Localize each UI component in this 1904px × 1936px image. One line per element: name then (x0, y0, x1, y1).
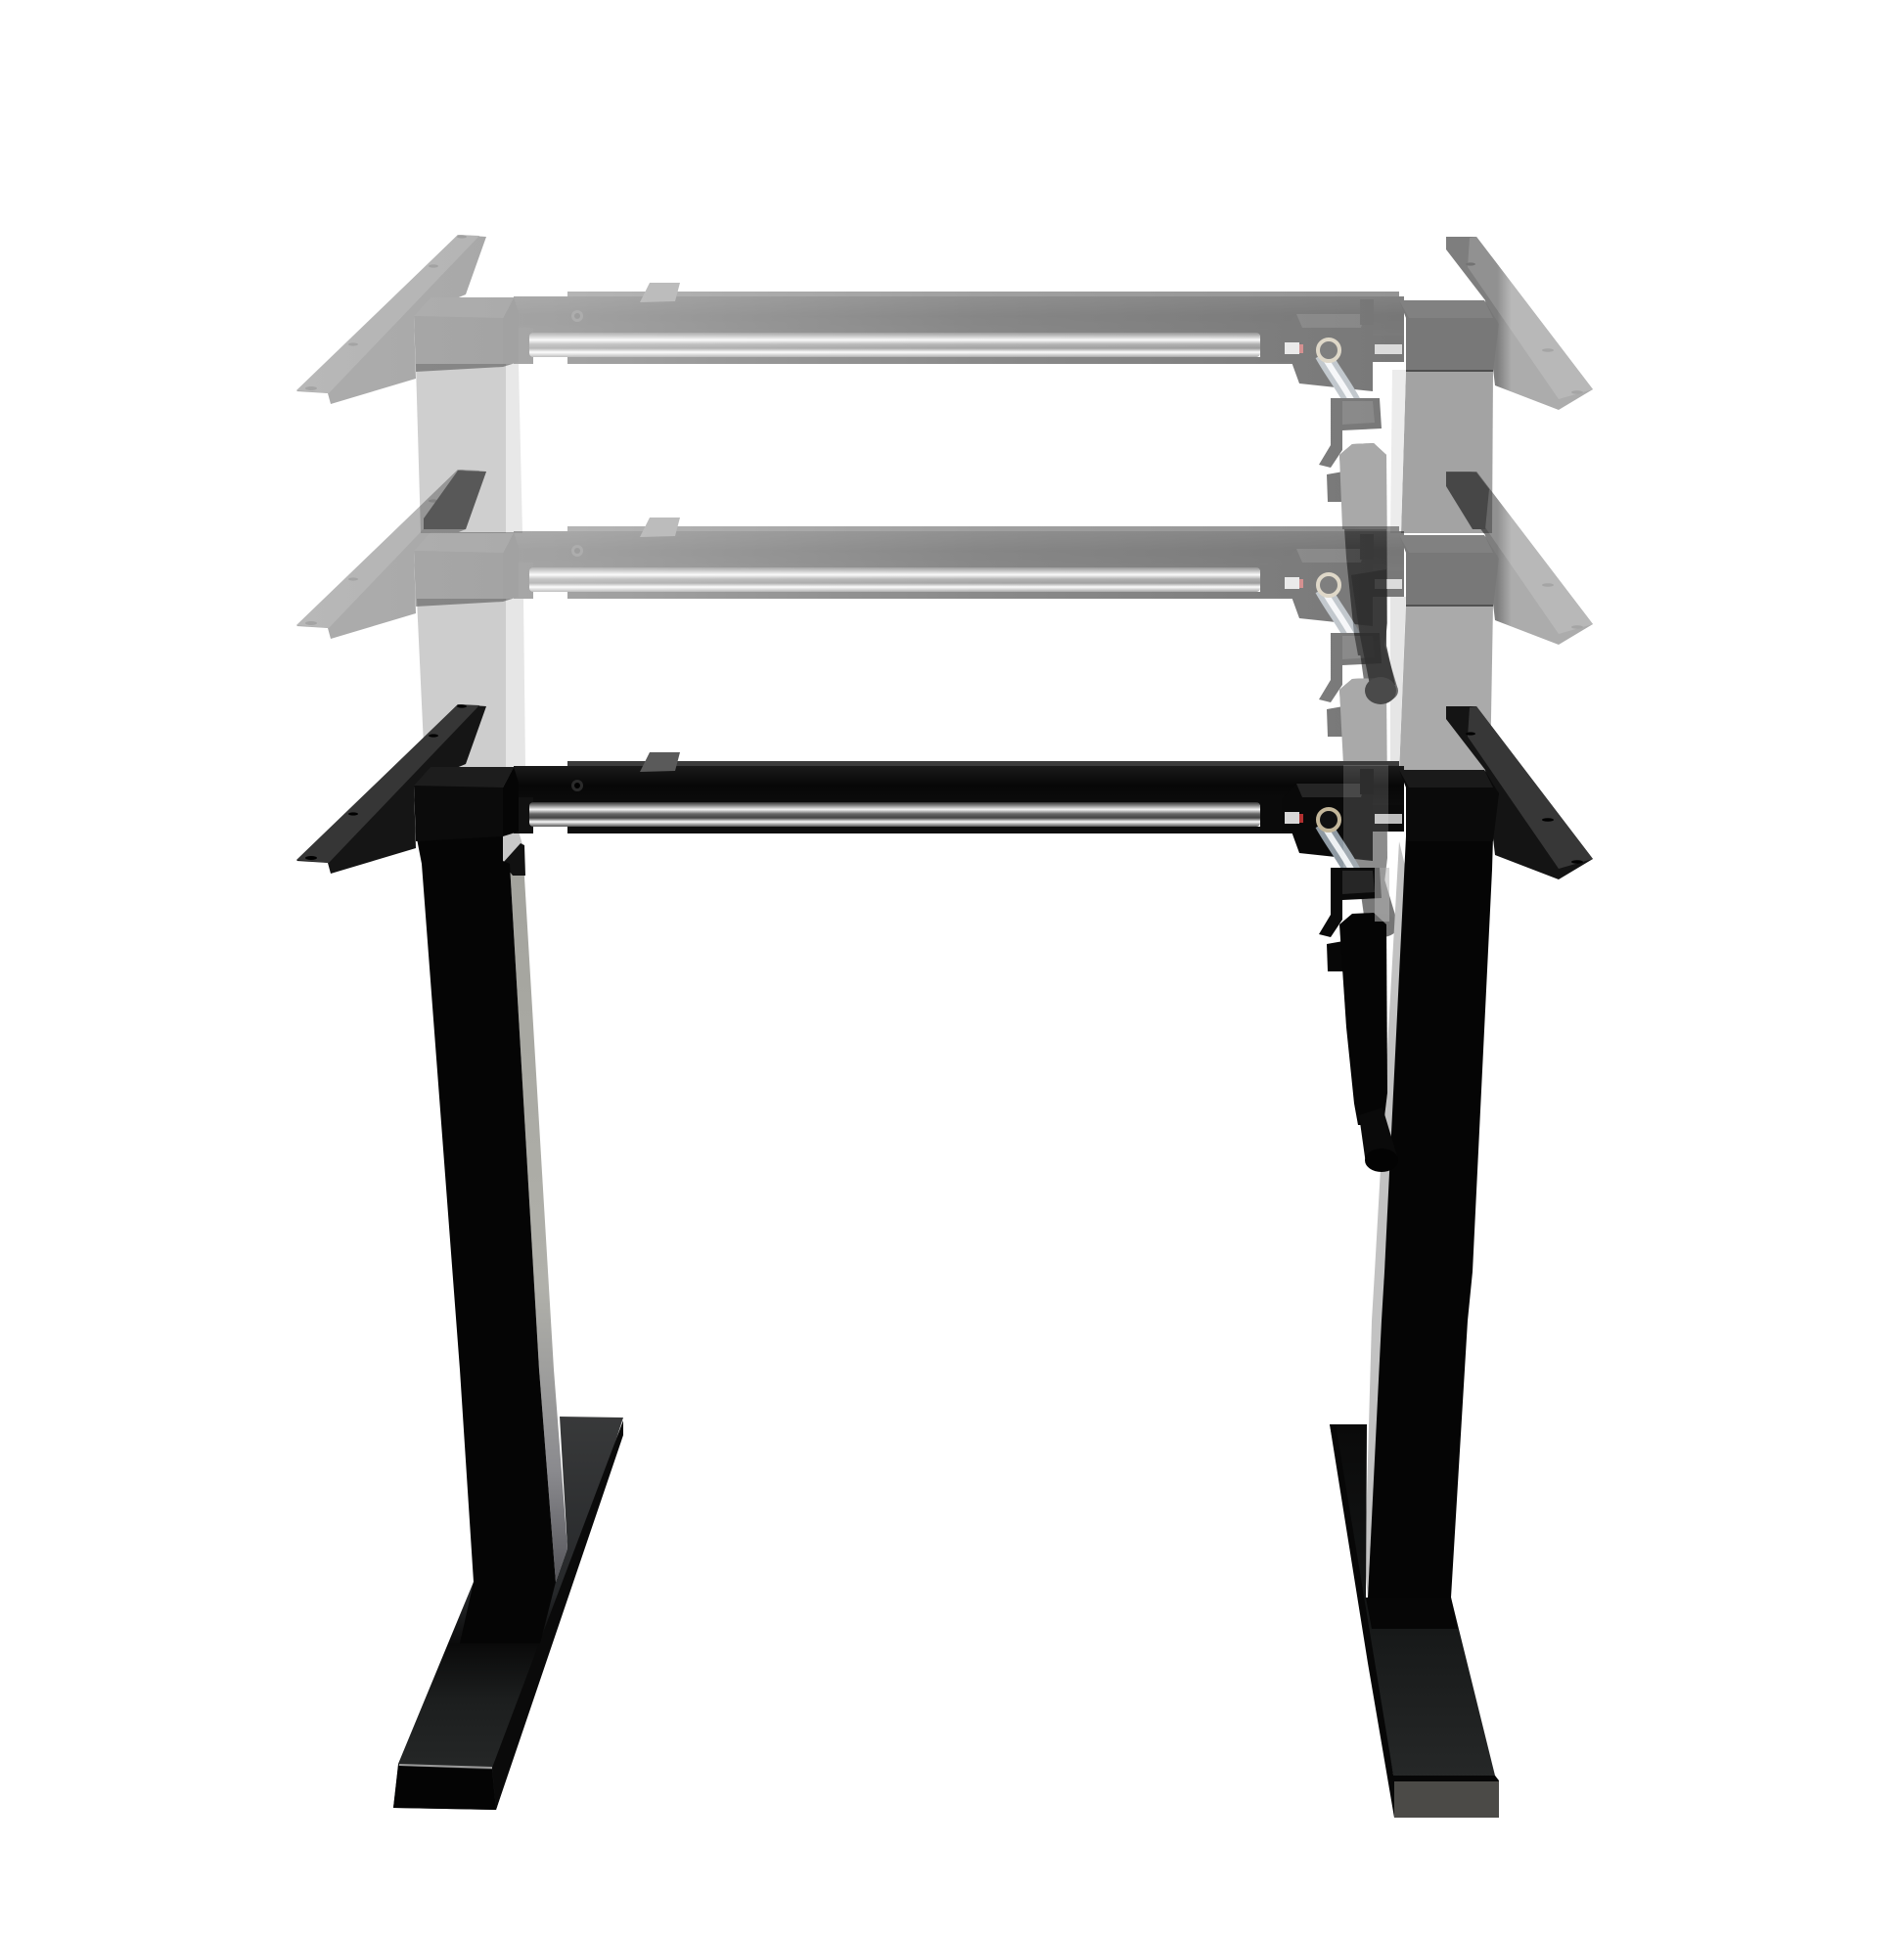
right foot (1330, 1424, 1499, 1818)
highest frame handle arm, light (1339, 443, 1386, 529)
top ghost: right column (1390, 370, 1493, 773)
desk frame at highest position (296, 235, 1593, 702)
illustration: desk frame at three heights (296, 235, 1593, 1818)
desk frame at middle position (296, 470, 1593, 937)
left foot (393, 1417, 623, 1810)
middle frame handle arm, light (1339, 678, 1386, 765)
top ghost: left column (416, 364, 525, 767)
right leg (1365, 836, 1493, 1598)
highest frame crank handle seen through (1351, 569, 1396, 704)
desk frame at lowest position (296, 704, 1593, 1172)
middle bracket overlap on columns (424, 471, 1489, 529)
translucent ghost handle veil over lowest frame (1343, 765, 1389, 922)
left leg (416, 832, 567, 1582)
